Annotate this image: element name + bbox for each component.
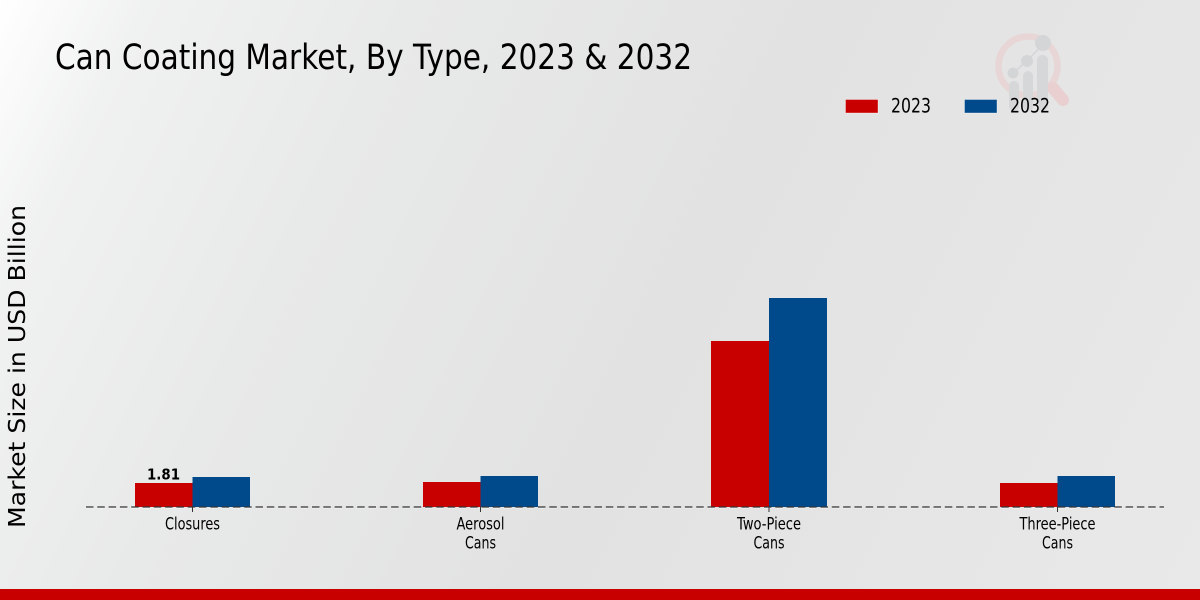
- bars: Two-Piece Cans: [711, 298, 827, 507]
- watermark logo icon: [998, 35, 1063, 111]
- legend item: 2023: 2023: [891, 94, 931, 118]
- x axis baseline: [86, 507, 1164, 512]
- bars: Aerosol Cans: [423, 476, 538, 507]
- category label: Aerosol Cans: [456, 514, 504, 552]
- category label: Three-Piece Cans: [1019, 514, 1096, 552]
- y axis label: Market Size in USD Billion: [5, 205, 31, 528]
- category label: Aerosol Cans: Aerosol: [456, 514, 504, 534]
- category label: Two-Piece Cans: [736, 514, 801, 552]
- legend item: 2032: [964, 94, 1050, 118]
- legend item: 2023: [846, 94, 931, 118]
- legend item: 2032: 2032: [1010, 94, 1050, 118]
- bars: Three-Piece Cans: [1000, 476, 1115, 507]
- bars: Closures: [135, 477, 250, 507]
- data label: 1.81: 1.81: [147, 466, 180, 484]
- category label: Two-Piece Cans: Cans: [754, 534, 784, 552]
- category label: Closures: Closures: [165, 514, 220, 534]
- bar chart: [86, 298, 1164, 552]
- title: Can Coating Market, By Type, 2023 & 2032: [55, 38, 692, 78]
- legend: [846, 94, 1050, 118]
- category label: Three-Piece Cans: Three-Piece: [1019, 514, 1096, 534]
- category label: Aerosol Cans: Cans: [465, 534, 496, 552]
- category label: Two-Piece Cans: Two-Piece: [736, 514, 801, 534]
- footer bar: [0, 589, 1200, 600]
- category label: Three-Piece Cans: Cans: [1042, 534, 1073, 552]
